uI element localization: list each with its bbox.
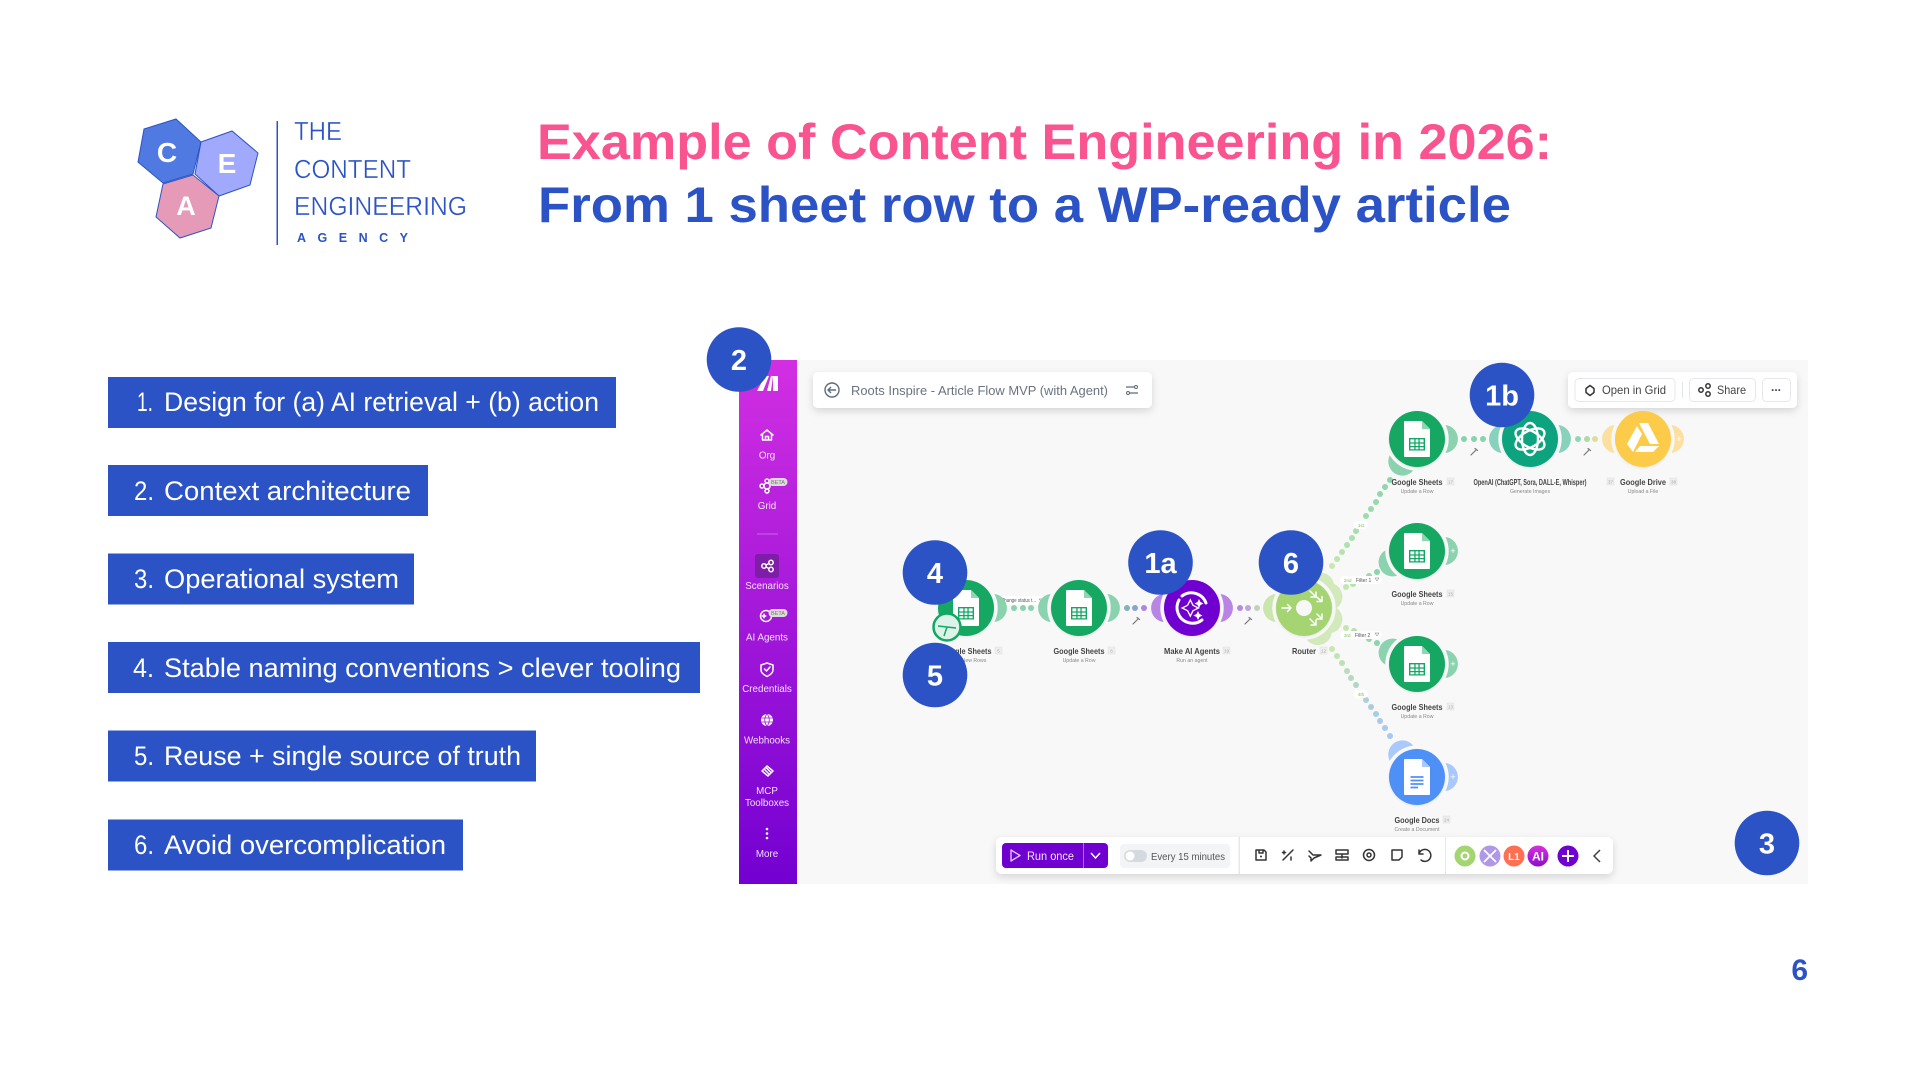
nav: AI Agents: AI Agents: [746, 632, 788, 644]
callout 6: 6: [1283, 548, 1299, 580]
node: Google Drive: 38: [1671, 480, 1676, 484]
node: Google Sheets trigger: Watch New Rows: [946, 658, 987, 664]
logo hexagon A: A: [176, 191, 196, 221]
node: Google Sheets row 2: Google Sheets: [1392, 589, 1443, 599]
logo wordmark: THE: [294, 116, 342, 146]
node: Google Sheets update: [1038, 580, 1120, 664]
nav: AI Agents: [746, 609, 788, 644]
logo hexagon C: [138, 119, 201, 183]
item 2: 2.: [134, 476, 154, 506]
nav: Credentials: [742, 663, 792, 695]
branch 4 dots: [1329, 646, 1393, 739]
clock badge: [934, 614, 960, 640]
nav: MCP Toolboxes: [745, 766, 789, 809]
callout 1b: [1470, 363, 1534, 427]
callout 1a: [1128, 530, 1193, 595]
callout 6: [1259, 530, 1323, 595]
scenario title bar: [813, 372, 1152, 408]
node: Router: [1263, 567, 1347, 656]
bottom toolbar: [996, 837, 1613, 874]
toolbar module buttons: L1: [1508, 852, 1520, 863]
nav: Org: Org: [759, 450, 775, 462]
callout 2: [707, 327, 771, 392]
branch filter labels: Filter 1: [1356, 578, 1372, 584]
item 6: 6.: [134, 830, 154, 860]
node: Google Sheets update: Update a Row: [1063, 658, 1096, 664]
node: Router: 12: [1321, 648, 1326, 654]
scenario title bar: Roots Inspire - Article Flow MVP (with Agent): [851, 383, 1108, 398]
item 3: [108, 554, 414, 604]
callout 2: 2: [731, 345, 747, 377]
callout 4: [903, 540, 967, 605]
item 3: 3.: [134, 564, 154, 594]
item 4: Stable naming conventions > clever tooling: [164, 653, 681, 683]
branch filter labels: Change status t...: [1001, 598, 1036, 604]
branch filter labels: 4th: [1358, 692, 1365, 697]
nav: Scenarios: [745, 554, 789, 592]
node: Make AI Agents: 19: [1224, 648, 1229, 654]
node: Google Drive: [1602, 411, 1684, 495]
node: Make AI Agents: [1151, 580, 1233, 664]
node: Google Sheets row 3: Google Sheets: [1392, 702, 1443, 712]
node: Google Drive: Google Drive: [1620, 477, 1666, 487]
nav: Credentials: Credentials: [742, 684, 792, 695]
node: OpenAI: Generate Images: [1510, 489, 1550, 495]
logo wordmark: CONTENT: [294, 154, 411, 184]
node: Google Sheets update: Google Sheets: [1054, 646, 1105, 656]
node: Google Docs: Google Docs: [1394, 815, 1440, 825]
title: Example of Content Engineering in 2026:: [537, 114, 1552, 170]
node: Make AI Agents: Run an agent: [1176, 658, 1208, 664]
logo hexagon E: [195, 131, 258, 196]
nav: Grid: Grid: [758, 501, 776, 512]
logo wordmark: [294, 116, 467, 221]
schedule toggle: Every 15 minutes: [1151, 851, 1225, 863]
item 1: 1.: [137, 387, 153, 417]
logo: AGENCY: [297, 231, 409, 245]
top-right action bar: [1568, 372, 1797, 408]
node: Google Drive: Upload a File: [1628, 489, 1658, 495]
toolbar module buttons: AI: [1532, 850, 1544, 864]
callout 1b: 1b: [1485, 380, 1519, 412]
node: Make AI Agents: Make AI Agents: [1164, 646, 1220, 656]
callout 4: 4: [927, 558, 943, 590]
node: Google Sheets row 1: Update a Row: [1401, 489, 1434, 495]
callout 1a: 1a: [1144, 548, 1177, 580]
item 2: [108, 465, 428, 516]
branch filter labels: 1st: [1358, 523, 1365, 528]
branch 1 dots: [1329, 477, 1393, 569]
item 1: Design for (a) AI retrieval + (b) action: [164, 387, 599, 417]
connectors: [996, 436, 1598, 739]
logo hexagon E: E: [218, 148, 236, 179]
logo wordmark: ENGINEERING: [294, 191, 467, 221]
top-right action bar: Open in Grid: [1602, 383, 1666, 397]
node: Google Sheets row 1: [1383, 411, 1458, 495]
nav: More: More: [756, 849, 779, 860]
sidebar: [739, 360, 797, 884]
item 5: 5.: [134, 741, 154, 771]
branch filter labels: Filter 2: [1355, 633, 1370, 639]
nav: Scenarios: Scenarios: [745, 581, 789, 592]
connector dots main row: [1011, 436, 1598, 611]
node: Google Docs: Create a Document: [1395, 827, 1440, 833]
node: Google Drive: 37: [1608, 480, 1613, 484]
title: From 1 sheet row to a WP-ready article: [538, 177, 1511, 233]
logo hexagon A: [156, 175, 219, 238]
item 4: 4.: [133, 653, 154, 683]
node: Google Sheets row 3: 13: [1448, 704, 1453, 710]
nav: Webhooks: [744, 714, 790, 746]
nav: More: [756, 828, 779, 860]
item 4: [108, 642, 700, 693]
item 2: Context architecture: [164, 476, 411, 506]
branch 3 dots: [1343, 625, 1380, 646]
branch filter labels: 3rd: [1344, 633, 1351, 638]
callout 3: 3: [1759, 828, 1775, 860]
node: Google Sheets row 2: 15: [1448, 592, 1453, 596]
node: Google Sheets row 2: +: [1450, 546, 1456, 556]
logo: [138, 116, 467, 245]
item 5: [108, 730, 536, 782]
toolbar icons: [1256, 849, 1431, 861]
page number: 6: [1791, 954, 1808, 987]
top-right action bar: ...: [1771, 380, 1781, 394]
node: Google Sheets row 2: Update a Row: [1401, 601, 1434, 607]
item 5: Reuse + single source of truth: [164, 741, 521, 771]
wrench icons: [1133, 448, 1590, 624]
item 3: Operational system: [164, 564, 399, 594]
branch filter labels: 2nd: [1344, 578, 1352, 583]
node: Google Sheets row 1: 17: [1448, 480, 1453, 484]
branch 2 dots: [1343, 569, 1380, 590]
node: Google Docs: 24: [1444, 818, 1449, 822]
nav: MCP Toolboxes: MCP: [756, 786, 778, 797]
schedule toggle: [1120, 844, 1230, 868]
node: Google Sheets update: 6: [1110, 648, 1113, 654]
node: Google Sheets row 1: Google Sheets: [1392, 477, 1443, 487]
callout 5: 5: [927, 660, 943, 692]
panel: workflow screenshot: [739, 360, 1808, 884]
item 6: [108, 820, 463, 870]
item 6: Avoid overcomplication: [164, 830, 446, 860]
title: [537, 114, 1552, 233]
list of principles: [108, 377, 700, 870]
run once button: [1002, 843, 1108, 868]
node: Google Docs: +: [1450, 772, 1456, 782]
logo hexagon C: C: [157, 137, 177, 168]
branch filter labels: [996, 521, 1382, 698]
node: Google Sheets row 3: +: [1450, 659, 1456, 669]
nav: Grid: BETA: [771, 480, 785, 486]
callout 5: [903, 643, 967, 707]
node: OpenAI: [1474, 411, 1587, 495]
nav: Grid: [758, 478, 788, 512]
node: OpenAI: OpenAI (ChatGPT, Sora, DALL-E, Whisper): [1473, 477, 1587, 487]
nav: MCP Toolboxes: Toolboxes: [745, 798, 789, 809]
node: Google Sheets row 3: [1374, 634, 1458, 720]
nav: AI Agents: BETA: [771, 611, 785, 617]
top-right action bar: Share: [1717, 383, 1746, 397]
nav: Webhooks: Webhooks: [744, 736, 790, 746]
node: Google Drive: +: [1676, 434, 1682, 444]
node: Google Sheets trigger: 5: [997, 648, 1000, 654]
node: Google Docs: [1383, 735, 1458, 833]
node: Google Sheets trigger: Google Sheets: [940, 646, 992, 656]
node: Google Sheets row 3: Update a Row: [1401, 714, 1434, 720]
item 1: [108, 377, 616, 428]
run once button: Run once: [1027, 849, 1074, 863]
node: Router: Router: [1292, 646, 1317, 656]
nav: Org: [759, 430, 775, 462]
node: Google Sheets trigger: [934, 580, 1007, 664]
toolbar module buttons: [1454, 846, 1600, 866]
callout 3: [1735, 811, 1799, 875]
node: Google Sheets row 2: [1374, 523, 1458, 607]
